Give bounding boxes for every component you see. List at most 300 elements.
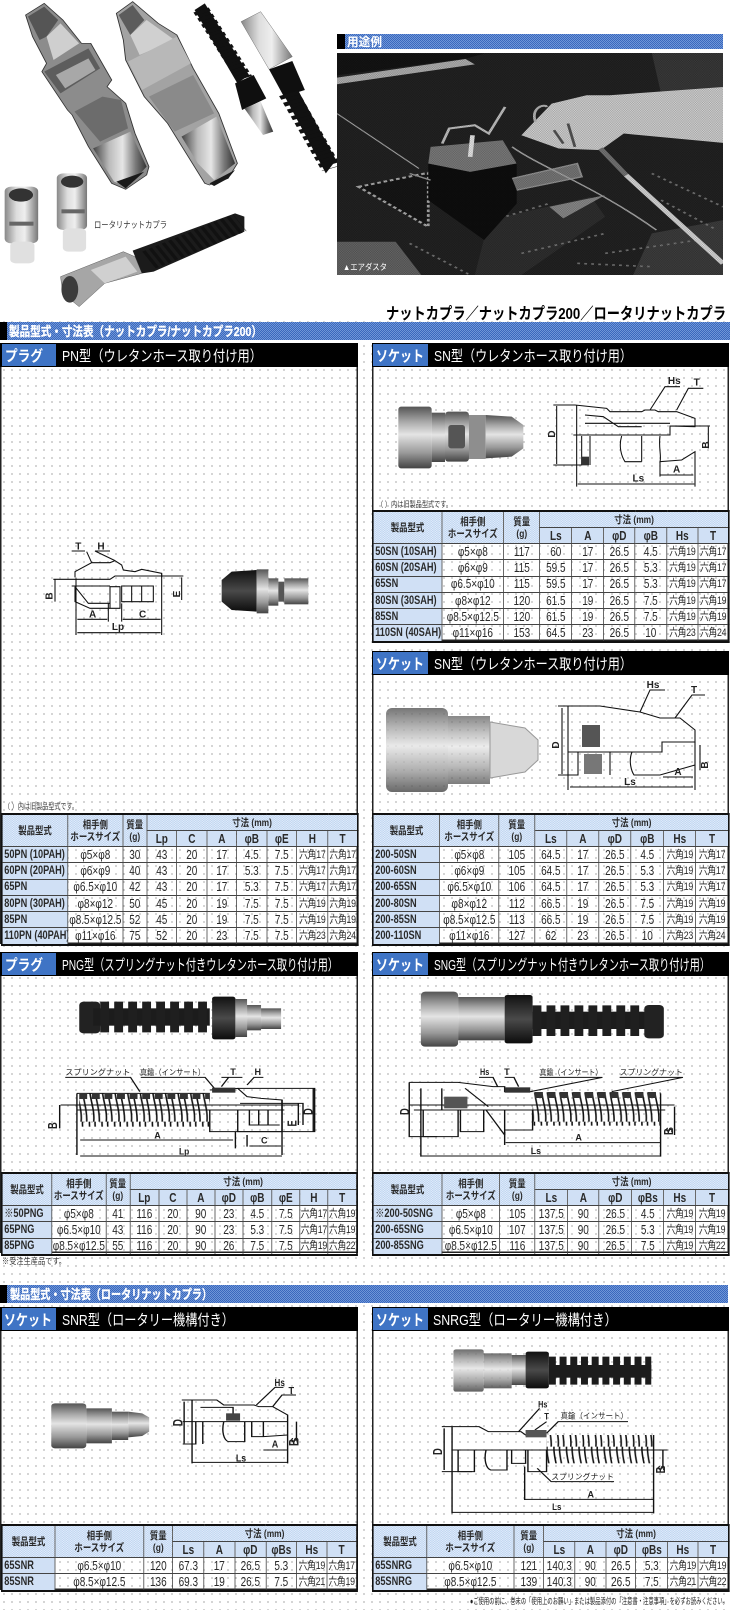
table: SN: 85SN [375, 611, 398, 623]
table: PN: 六角17 [329, 849, 356, 861]
table: PN: 7.5 [275, 848, 289, 862]
table: SNG: 137.5 [539, 1223, 564, 1237]
photo: PNG plug [79, 997, 281, 1039]
table: SNR: Ls [182, 1542, 194, 1556]
table: PN: 六角23 [299, 930, 326, 942]
speckled debris [410, 173, 723, 275]
table: 200 SN: 製品型式 [390, 824, 423, 836]
header: PNG type: プラグ [5, 956, 43, 974]
table: 200 SN: 7.5 [640, 913, 654, 927]
line drawing: SNRG socket [442, 1408, 668, 1513]
table: SN: 4.5 [644, 545, 658, 559]
table: PN: 45 [156, 913, 167, 927]
header: PN type: PN型（ウレタンホース取り付け用） [62, 348, 262, 365]
table: 200 SN: φ6×φ9 [454, 864, 484, 878]
table: SN: 7.5 [644, 594, 658, 608]
dimension labels: B [47, 1122, 60, 1129]
header: SN type 200: SN型（ウレタンホース取り付け用） [434, 656, 632, 673]
header: SN type: ソケット [376, 348, 424, 365]
photo: PN plug [222, 569, 308, 613]
table: 200 SN: 17 [577, 864, 588, 878]
dimension labels: Ls [236, 1452, 246, 1464]
table: 200 SN: 200-85SN [375, 914, 417, 926]
table: SNR: φBs [271, 1542, 291, 1556]
table: PN: 23 [216, 929, 227, 943]
callouts [540, 1067, 683, 1077]
table: SNR: 85SNR [4, 1576, 34, 1588]
table: PNG: 六角19 [301, 1240, 327, 1252]
table: 200 SN: φ11×φ16 [449, 929, 489, 943]
diagram and photo: SNRG socket [431, 1349, 669, 1514]
header: SN type 200: ソケット [376, 656, 424, 673]
table: 200 SN: φ5×φ8 [454, 848, 484, 862]
dimension labels: D [302, 1108, 316, 1115]
table: SNR: 7.5 [274, 1575, 288, 1589]
table: 200 SN: A [579, 832, 586, 846]
table: PNG: 116 [136, 1207, 152, 1221]
table: SN: 5.3 [644, 577, 658, 591]
table: PN: φ11×φ16 [75, 929, 115, 943]
table: SN: 六角19 [700, 595, 726, 607]
table: 200 SN: 112 [509, 897, 525, 911]
table: SNG: 26.5 [606, 1223, 625, 1237]
spring ribs [547, 1435, 654, 1463]
table: 200 SN: 23 [577, 929, 588, 943]
table: SNG: 7.5 [641, 1239, 655, 1253]
table: SNRG: (g) [523, 1542, 534, 1554]
table: SNG: 105 [509, 1207, 526, 1221]
photo: socket nut coupler [116, 2, 237, 186]
table: PNG: φ8.5×φ12.5 [53, 1239, 105, 1253]
table: SNR: 製品型式 [12, 1536, 45, 1548]
table: SNRG: 7.5 [645, 1575, 659, 1589]
table: SN: φ8.5×φ12.5 [447, 610, 499, 624]
table: PN: 六角19 [329, 898, 356, 910]
table: SN: 六角24 [700, 627, 726, 639]
table: SNRG: 121 [520, 1559, 537, 1573]
table: SN: ホースサイズ [448, 528, 498, 540]
table: SNR: 65SNR [4, 1560, 34, 1572]
dimension labels: D [551, 741, 562, 749]
table: SN: 六角19 [669, 611, 696, 623]
callouts [65, 1067, 205, 1077]
panel: PNG plug [0, 952, 358, 1253]
table: PN: 六角17 [299, 865, 326, 877]
table: SN: 製品型式 [391, 522, 424, 534]
dimension labels: Ls [632, 474, 645, 485]
table: SNG: 質量 [509, 1178, 526, 1190]
dimension labels [431, 1400, 669, 1512]
table: SNR: 六角21 [299, 1576, 325, 1588]
table: PN: ホースサイズ [70, 830, 120, 842]
table: 200 SN: 200-60SN [375, 865, 417, 877]
table: SNR: 5.3 [274, 1559, 288, 1573]
table: PNG: 20 [167, 1207, 178, 1221]
table: PN [1, 813, 359, 946]
table: PN: 六角24 [329, 930, 356, 942]
table: PN: 六角17 [329, 881, 356, 893]
table: PN: 50PN (10PAH) [4, 849, 65, 861]
table: PNG: 116 [136, 1239, 152, 1253]
photo: rotary spring socket [61, 213, 244, 307]
table: PN: 六角19 [299, 898, 326, 910]
table: SNR [1, 1524, 358, 1592]
table: PN: 六角17 [299, 849, 326, 861]
table: SN: 質量 [513, 516, 530, 528]
table: 200 SN: 200-65SN [375, 881, 417, 893]
table: SNG: φ6.5×φ10 [449, 1223, 493, 1237]
table: SNR: 120 [150, 1559, 167, 1573]
table: PNG: 90 [195, 1239, 206, 1253]
dimension labels: Ls [624, 777, 636, 788]
header: SNR type: SNR型（ロータリー機構付き） [62, 1312, 234, 1329]
table: PN: 110PN (40PAH) [4, 930, 68, 942]
table: PN: 17 [216, 880, 227, 894]
table: SN: 19 [582, 594, 593, 608]
table: SN: 六角19 [669, 595, 696, 607]
table: 200 SN: φ6.5×φ10 [447, 880, 491, 894]
table: SN: 59.5 [546, 561, 566, 575]
table: SN: 80SN (30SAH) [375, 595, 437, 607]
table: SN: φD [612, 528, 626, 542]
table: SNG: 5.3 [641, 1223, 655, 1237]
table: SNG: 六角19 [667, 1240, 693, 1252]
dimension labels: A [588, 1490, 594, 1500]
table: SNG: 寸法 (mm) [612, 1176, 651, 1188]
table: SN: T [710, 528, 716, 542]
table: 200 SN: 六角19 [699, 914, 725, 926]
table: PN: 7.5 [275, 913, 289, 927]
line drawing: SNG socket [409, 1077, 683, 1157]
table: PNG: 116 [136, 1223, 152, 1237]
application example heading [337, 34, 723, 49]
diagram and photo: PNG plug [47, 996, 316, 1157]
table: 200 SN: 26.5 [605, 864, 625, 878]
table: PNG: ※50PNG [4, 1208, 44, 1220]
table: PN: 六角19 [329, 914, 356, 926]
table: 200 SN: 26.5 [605, 848, 625, 862]
table: SN: φ8×φ12 [455, 594, 491, 608]
table: PN: H [309, 832, 316, 846]
table: PNG: 23 [223, 1207, 234, 1221]
table: PNG: 7.5 [279, 1207, 293, 1221]
table: 200 SN: 64.5 [541, 880, 561, 894]
table: SN: 7.5 [644, 610, 658, 624]
table: SNRG: Hs [676, 1542, 689, 1556]
table: PN: 19 [216, 913, 227, 927]
table: SNG: T [709, 1190, 715, 1204]
table: PNG: 7.5 [279, 1239, 293, 1253]
photo caption: air duster: ▲エアダスタ [343, 262, 387, 272]
table: SNRG: Ls [553, 1542, 565, 1556]
table: SNRG: 六角19 [700, 1560, 726, 1572]
dimension labels: A [575, 1133, 582, 1143]
table: PNG: 20 [167, 1239, 178, 1253]
table: SNR: 六角19 [299, 1560, 325, 1572]
table: PN: 20 [186, 929, 197, 943]
table: SNG: 六角19 [667, 1208, 693, 1220]
table: SNRG: φD [614, 1542, 628, 1556]
dimension labels: E [172, 590, 183, 597]
table: SN: 120 [513, 610, 530, 624]
table: PN: 30 [129, 848, 140, 862]
table: 200 SN: 127 [508, 929, 525, 943]
dimension labels: E [286, 1120, 300, 1126]
callouts: 真鍮（インサート） [140, 1067, 205, 1077]
table: SN: 60SN (20SAH) [375, 562, 437, 574]
table: SN: 50SN (10SAH) [375, 546, 437, 558]
table: SNRG: 90 [585, 1575, 596, 1589]
callouts: スプリングナット [620, 1067, 683, 1077]
table: SN: 六角23 [669, 627, 696, 639]
table: PN: 17 [216, 848, 227, 862]
table: PN: 製品型式 [18, 824, 52, 836]
header: SNR type: ソケット [4, 1312, 52, 1329]
table: PNG: 90 [195, 1223, 206, 1237]
table: SN: 26.5 [610, 561, 629, 575]
table: SNG: 90 [578, 1223, 589, 1237]
table: SN: (g) [516, 528, 527, 540]
table: 200 SN: 66.5 [541, 897, 561, 911]
table: PN: 7.5 [275, 897, 289, 911]
callouts: 真鍮（インサート） [540, 1067, 602, 1077]
table: PN: φB [245, 832, 259, 846]
dimension labels: B [45, 592, 56, 600]
table: 200 SN: 64.5 [541, 848, 561, 862]
table: PNG: 23 [223, 1223, 234, 1237]
table: SNG: φ5×φ8 [456, 1207, 486, 1221]
panel: PN plug [0, 343, 358, 944]
table: SN: 120 [513, 594, 530, 608]
table: PN: 45 [156, 897, 167, 911]
table: 200 SN: 質量 [508, 818, 525, 830]
table: PN: 7.5 [275, 929, 289, 943]
table: PN: φ5×φ8 [80, 848, 110, 862]
line drawing: PNG plug [60, 1077, 315, 1156]
callouts: スプリングナット [551, 1471, 614, 1482]
table: SNRG: 26.5 [611, 1559, 631, 1573]
table: 200 SN: 26.5 [605, 880, 625, 894]
table: SN: 117 [514, 545, 530, 559]
table: PNG: 4.5 [250, 1207, 264, 1221]
photo: rotary sockets [5, 173, 87, 263]
table: 200 SN: 26.5 [605, 929, 625, 943]
table: PNG: 六角17 [301, 1224, 327, 1236]
dimension labels: T [230, 1068, 236, 1077]
table: 200 SN: 六角23 [667, 930, 693, 942]
header: SN type [372, 343, 729, 367]
table: PNG: 製品型式 [10, 1184, 44, 1196]
table: 200 SN: 19 [577, 897, 588, 911]
table: SN: 115 [514, 561, 530, 575]
table: 200 SN: φD [608, 832, 622, 846]
section heading: dimensions table nut coupler [0, 322, 730, 340]
table: SNG: Ls [545, 1190, 557, 1204]
table: SNRG: A [587, 1542, 594, 1556]
table: SN: 六角19 [669, 578, 696, 590]
table: PN: 43 [156, 880, 167, 894]
table: 200 SN: 10 [642, 929, 653, 943]
table: SNRG: 85SNRG [375, 1576, 412, 1588]
machine block [410, 107, 582, 240]
header: SN type: SN型（ウレタンホース取り付け用） [434, 348, 632, 365]
table: PNG: φE [279, 1190, 293, 1204]
header: PN type [0, 343, 358, 367]
dimension labels: D [170, 1419, 186, 1426]
product photographs [4, 1, 337, 307]
dimension labels [170, 1377, 302, 1464]
diagram and photo: SN socket [398, 376, 712, 487]
table: SN: 26.5 [610, 610, 629, 624]
table: PNG: A [197, 1190, 204, 1204]
table: SNRG: 寸法 (mm) [616, 1528, 656, 1540]
table: PN: 相手側 [83, 818, 108, 830]
table: SNG: 4.5 [641, 1207, 655, 1221]
table: SN: 26.5 [610, 545, 629, 559]
table: SNG: 六角19 [699, 1208, 725, 1220]
table: 200 SN: 200-80SN [375, 898, 417, 910]
table: SNR: (g) [153, 1542, 164, 1554]
table: SNG: 200-85SNG [375, 1240, 424, 1252]
table: 200 SN: φB [640, 832, 654, 846]
dimension labels: Hs [538, 1400, 547, 1410]
table: SN: 64.5 [546, 626, 566, 640]
table: PN: 20 [186, 897, 197, 911]
dimension labels: B [700, 761, 711, 769]
table: PN: 50 [129, 897, 140, 911]
table: SN [372, 510, 730, 643]
table: SN: 六角17 [700, 546, 726, 558]
header: PNG type [0, 952, 358, 976]
header: SNR type [0, 1307, 358, 1331]
table: SNR: φ8.5×φ12.5 [73, 1575, 125, 1589]
dimension labels: T [504, 1068, 510, 1077]
dimension labels: Ls [531, 1147, 541, 1156]
dimension labels: Hs [275, 1377, 285, 1388]
dimension labels: C [261, 1136, 268, 1146]
table: PN: 寸法 (mm) [232, 816, 272, 828]
photo: plug nut coupler [26, 3, 149, 189]
table: SNRG: 140.3 [547, 1559, 572, 1573]
table: SNR: 136 [150, 1575, 167, 1589]
photo: spring socket [241, 12, 336, 173]
table: SNG: φBs [638, 1190, 658, 1204]
table: SN: 61.5 [546, 594, 566, 608]
dimension labels: T [289, 1385, 295, 1396]
table: SNRG: 26.5 [611, 1575, 631, 1589]
table: PN: 19 [216, 897, 227, 911]
dimension labels [45, 541, 183, 633]
dimension labels [547, 376, 712, 485]
table: SN: 17 [582, 577, 593, 591]
table: PNG: H [310, 1190, 317, 1204]
table: PNG: 寸法 (mm) [223, 1176, 263, 1188]
header: PN type: プラグ [5, 347, 43, 365]
dimension labels: Hs [480, 1068, 489, 1077]
table: SN: 17 [582, 545, 593, 559]
line drawing: SN socket [553, 387, 710, 487]
table: SNRG: ホースサイズ [445, 1542, 495, 1554]
table: PNG: 7.5 [250, 1239, 264, 1253]
table: 200 SN: 六角19 [699, 898, 725, 910]
table: 200 SN: 66.5 [541, 913, 561, 927]
table: PN: 20 [186, 913, 197, 927]
table: 200 SN: ホースサイズ [444, 830, 494, 842]
table: PN: (g) [129, 830, 140, 842]
dimension labels: Bs [286, 1437, 302, 1446]
table: PN: 40 [129, 864, 140, 878]
table: SN: 六角17 [700, 562, 726, 574]
table: PNG: 六角22 [329, 1240, 355, 1252]
table: 200 SN: T [709, 832, 715, 846]
dimension labels: B [701, 441, 712, 449]
table: SNR: 相手側 [87, 1530, 112, 1542]
dimension labels: T [694, 377, 700, 388]
line drawing: SNR socket [182, 1387, 296, 1463]
table: PN: φ8.5×φ12.5 [69, 913, 121, 927]
table: SNR: 質量 [150, 1530, 167, 1542]
panel: 200 SN socket [372, 651, 729, 944]
table: PN: 7.5 [245, 897, 259, 911]
photo: SNRG socket [453, 1349, 651, 1392]
table: 200 SN: 200-50SN [375, 849, 417, 861]
dimension labels [399, 1068, 677, 1156]
table: SNG: φ8.5×φ12.5 [445, 1239, 497, 1253]
callouts: スプリングナット [65, 1067, 131, 1077]
table: PNG: φB [250, 1190, 264, 1204]
table: SN: 26.5 [610, 626, 629, 640]
dimension labels: Ls [552, 1503, 561, 1512]
table: 200 SN: 7.5 [640, 897, 654, 911]
table: 200 SN: φ8×φ12 [452, 897, 487, 911]
table: PNG: 六角19 [329, 1208, 355, 1220]
table: SNG: 相手側 [458, 1178, 483, 1190]
table: 200 SN: 17 [577, 848, 588, 862]
table: PN: 52 [156, 929, 167, 943]
table: SN: 寸法 (mm) [614, 514, 654, 526]
photo: 200 SN socket [386, 708, 538, 792]
table: SN: 六角17 [700, 578, 726, 590]
table: SNR: 17 [214, 1559, 225, 1573]
table: SN: A [584, 528, 591, 542]
table: SNG: 200-65SNG [375, 1224, 424, 1236]
table: PNG: 六角19 [329, 1224, 355, 1236]
table: 200 SN [372, 813, 730, 946]
header: SNRG type: ソケット [376, 1312, 424, 1329]
table: 200 SN: 六角17 [699, 881, 725, 893]
table: PN: 17 [216, 864, 227, 878]
table: SNRG: 5.3 [645, 1559, 659, 1573]
table: PN: φ6.5×φ10 [73, 880, 117, 894]
table: 200 SN: 5.3 [640, 880, 654, 894]
table: SNR: 26.5 [241, 1575, 260, 1589]
table: 200 SN: (g) [511, 830, 522, 842]
table: SN: 六角19 [700, 611, 726, 623]
table: PNG: 26 [223, 1239, 234, 1253]
dimension labels [551, 680, 711, 788]
table: PNG: 7.5 [279, 1223, 293, 1237]
table: PNG: 六角17 [301, 1208, 327, 1220]
dimension labels: D [399, 1108, 413, 1115]
table: PN: Lp [156, 832, 168, 846]
table: SN: 17 [582, 561, 593, 575]
table: SNRG: 製品型式 [383, 1536, 417, 1548]
table: SNRG: 六角21 [670, 1576, 696, 1588]
table: PNG: ホースサイズ [54, 1190, 104, 1202]
table: SN: 相手側 [460, 516, 485, 528]
table: 200 SN: 六角24 [699, 930, 725, 942]
header: SN type 200 [372, 651, 729, 675]
